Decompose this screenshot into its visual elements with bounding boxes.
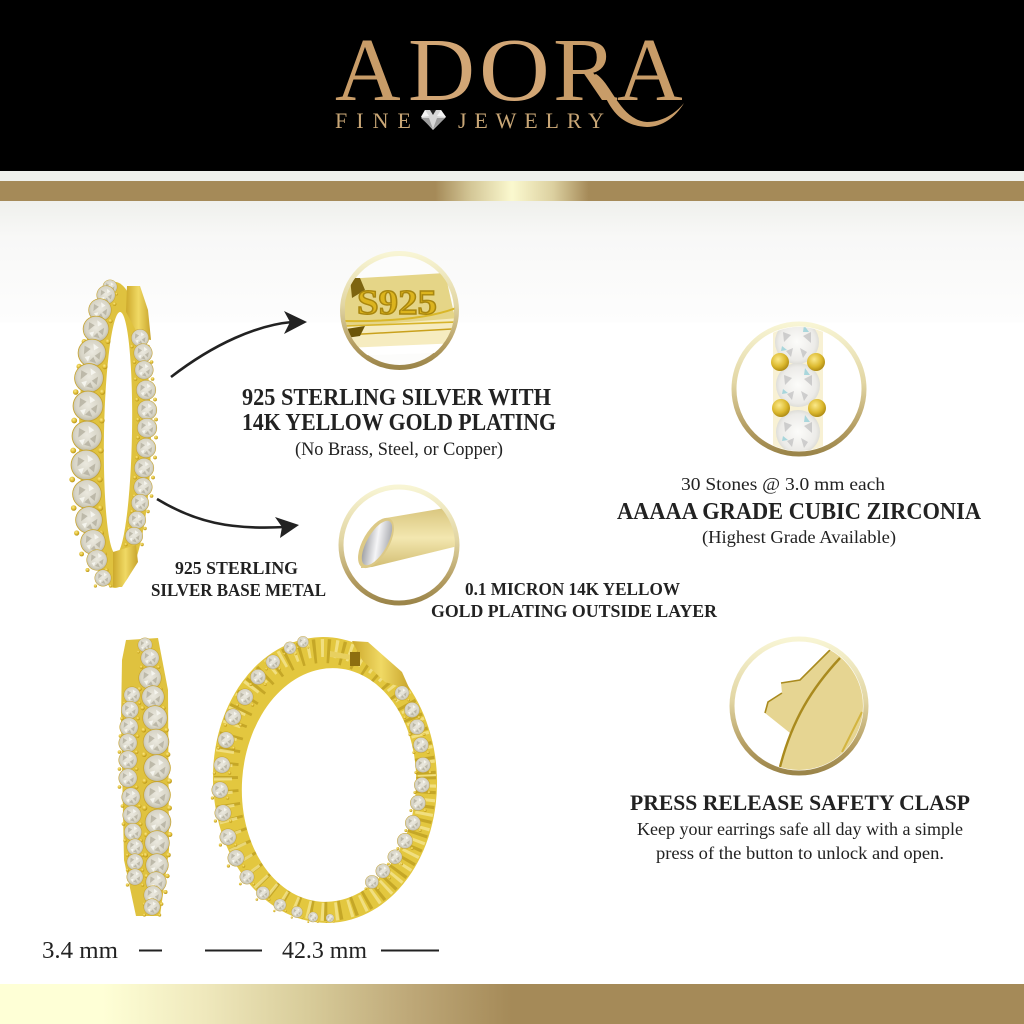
arrow: to stamp detail (171, 311, 307, 377)
subtext: no brass: (No Brass, Steel, or Copper) (295, 439, 503, 460)
heading: sterling silver (242, 385, 556, 436)
text: clasp description: Keep your earrings safe all day with a simple (637, 819, 963, 839)
text: clasp description (637, 819, 963, 863)
logo wordmark: D (408, 20, 475, 120)
heading: cubic zirconia: AAAAA GRADE CUBIC ZIRCONIA (617, 499, 982, 525)
subtext: highest grade: (Highest Grade Available) (702, 527, 896, 548)
logo wordmark: A (335, 19, 401, 120)
heading: sterling silver: 14K YELLOW GOLD PLATING (242, 410, 556, 436)
text: clasp description: press of the button to unlock and open. (656, 843, 944, 863)
heading: sterling silver: 925 STERLING SILVER WITH (242, 385, 551, 411)
label: plating: GOLD PLATING OUTSIDE LAYER (431, 601, 718, 621)
logo wordmark: O (479, 21, 550, 120)
logo wordmark (335, 19, 684, 127)
detail circle: safety clasp (732, 639, 870, 773)
logo wordmark: R (553, 21, 618, 120)
page background (0, 201, 1024, 323)
dimension: diameter: 42.3 mm (282, 938, 367, 964)
heading: safety clasp: PRESS RELEASE SAFETY CLASP (630, 790, 970, 815)
detail circle: S925 stamp (342, 254, 460, 368)
text: stones spec: 30 Stones @ 3.0 mm each (681, 474, 885, 494)
earring: angled view (69, 280, 158, 588)
earring: side view (118, 638, 172, 917)
label: plating (431, 579, 718, 621)
header: black logo banner (0, 0, 1024, 171)
earring: front view (208, 633, 442, 927)
arrow: to tube detail (157, 499, 299, 538)
logo tagline: FINE (335, 108, 411, 133)
gold band top (0, 181, 1024, 201)
detail circle: stones (734, 320, 864, 456)
label: base metal: 925 STERLING (175, 558, 298, 578)
clasp top (126, 286, 151, 340)
icon: diamond (421, 110, 446, 130)
text: stones spec (617, 474, 982, 548)
label: base metal: SILVER BASE METAL (151, 580, 326, 600)
label: base metal (151, 558, 326, 600)
hinge clasp (330, 641, 410, 690)
logo wordmark: A (617, 19, 683, 120)
logo tagline: JEWELRY (458, 108, 604, 133)
logo tagline (335, 108, 604, 133)
gold band bottom (0, 984, 1024, 1024)
strip above gold band (0, 171, 1024, 181)
dimension: width (42, 938, 162, 964)
dimension: width: 3.4 mm (42, 938, 118, 964)
detail circle: gold tube cross-section (341, 487, 458, 603)
clasp bottom (113, 545, 138, 587)
stamp text: S925 (357, 283, 437, 322)
label: plating: 0.1 MICRON 14K YELLOW (465, 579, 680, 599)
